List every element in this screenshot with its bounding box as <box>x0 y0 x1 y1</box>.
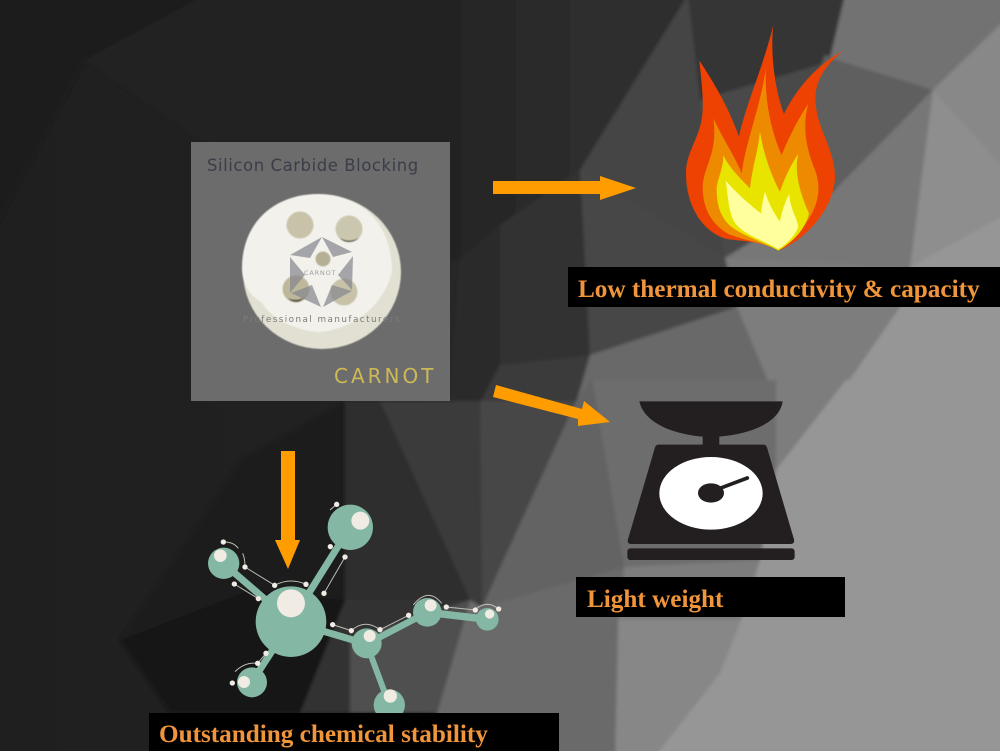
watermark: star logo <box>290 237 353 307</box>
watermark text: CARNOT <box>304 269 336 277</box>
arrow: to molecule <box>275 451 300 569</box>
icon: kitchen scale <box>627 401 795 560</box>
brand name: CARNOT <box>334 364 436 388</box>
panel: silicon carbide product image <box>191 142 450 401</box>
arrow: to flame <box>493 176 636 200</box>
caption: low thermal conductivity <box>568 267 1000 307</box>
icon: flame <box>686 25 843 251</box>
caption: outstanding chemical stability: Outstanding chemical stability <box>159 721 488 748</box>
icon: molecule <box>208 502 501 721</box>
caption: light weight <box>576 577 845 617</box>
arrow: to scale <box>493 385 610 426</box>
caption: outstanding chemical stability <box>149 713 559 751</box>
product heading: Silicon Carbide Blocking <box>207 156 419 175</box>
caption: low thermal conductivity: Low thermal conductivity & capacity <box>578 276 980 303</box>
caption: light weight: Light weight <box>587 586 724 613</box>
panel: silicon carbide product image: Professional manufacturers <box>243 315 401 325</box>
product: ceramic blocking disc <box>242 194 401 349</box>
